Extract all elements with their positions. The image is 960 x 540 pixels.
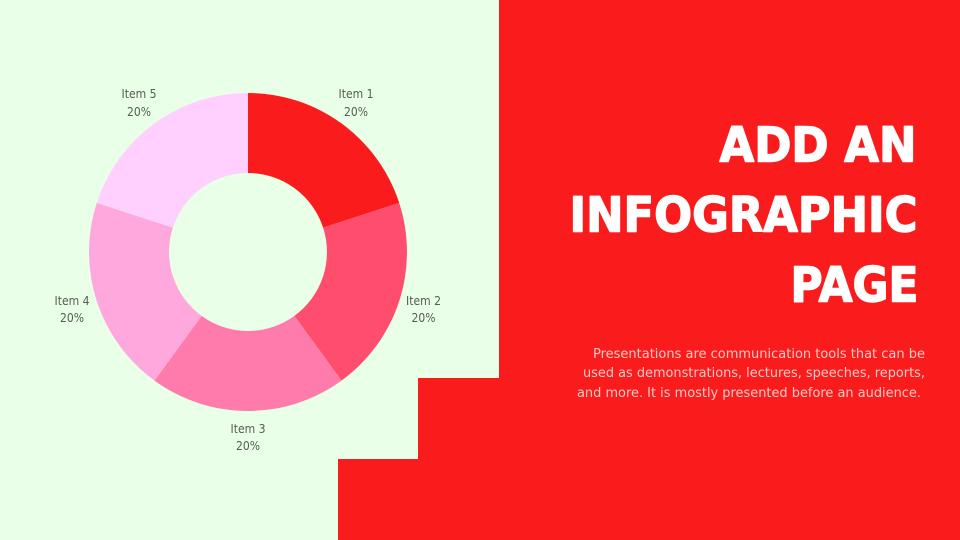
title: INFOGRAPHIC	[570, 188, 918, 244]
segment: Item 4	[89, 203, 202, 381]
segment: Item 5	[97, 93, 248, 228]
text block: description	[577, 347, 925, 401]
donut chart	[89, 93, 407, 411]
label: Item 3	[230, 421, 266, 453]
label: Item 5: 20%	[127, 104, 151, 119]
label: Item 4	[54, 293, 90, 325]
segment: Item 1	[248, 93, 399, 228]
text block: description: used as demonstrations, lectures, speeches, reports,	[583, 366, 925, 381]
panel: red right side with stepped corner	[338, 0, 960, 540]
label: Item 3: 20%	[236, 438, 260, 453]
label: Item 5	[122, 86, 156, 119]
label: Item 2: Item 2	[406, 293, 441, 308]
text block: description: and more. It is mostly presented before an audience.	[577, 386, 921, 401]
label: Item 1: Item 1	[338, 86, 374, 101]
label: Item 1	[338, 86, 374, 119]
label: Item 2: 20%	[412, 310, 436, 325]
label: Item 5: Item 5	[122, 86, 156, 101]
title: PAGE	[790, 258, 918, 314]
segment: Item 3	[154, 316, 342, 411]
title: ADD AN	[720, 118, 916, 174]
text block: description: Presentations are communication tools that can be	[593, 347, 925, 362]
label: Item 4: Item 4	[54, 293, 90, 308]
title	[570, 118, 918, 314]
segment: Item 2	[294, 203, 407, 381]
label: Item 3: Item 3	[230, 421, 266, 436]
label: Item 1: 20%	[344, 104, 368, 119]
label: Item 4: 20%	[60, 310, 84, 325]
label: Item 2	[406, 293, 441, 325]
